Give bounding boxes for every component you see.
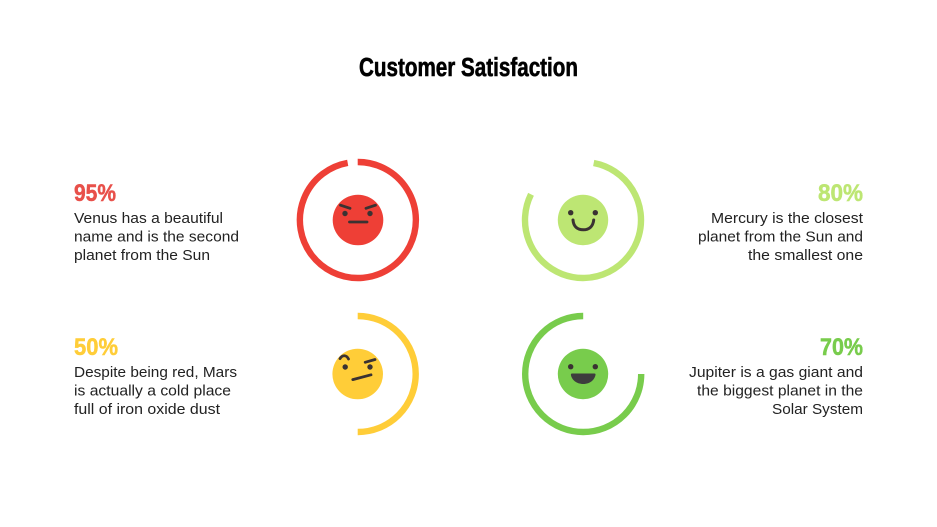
text block: Mercury description: Mercury is the closest — [711, 210, 864, 227]
icon: skeptical face — [332, 349, 383, 399]
percentage: 50%: 50% — [74, 334, 118, 361]
panel: 80% light green ring with smiling face — [525, 163, 641, 278]
progress ring: 50% — [358, 316, 416, 432]
icon: angry face — [333, 195, 383, 245]
text block: Jupiter description: Solar System — [772, 401, 863, 418]
percentage: 70%: 70% — [820, 334, 863, 361]
text block: Venus description: name and is the second — [74, 228, 239, 246]
percentage: 95%: 95% — [74, 180, 116, 207]
text block: Venus description: planet from the Sun — [74, 247, 210, 264]
percentage: 80%: 80% — [818, 180, 863, 207]
panel: 95% red ring with angry face — [300, 162, 416, 278]
panel: 70% green ring with laughing face — [525, 316, 641, 432]
text block: Mercury description: the smallest one — [748, 247, 863, 264]
panel: 50% yellow ring with skeptical face — [332, 316, 416, 432]
panel: 95% Venus text — [74, 180, 239, 264]
text block: Jupiter description: the biggest planet in the — [697, 382, 863, 400]
text block: Mars description: Despite being red, Mars — [74, 364, 237, 381]
text block: Mercury description: planet from the Sun and — [698, 228, 863, 246]
panel: 50% Mars text — [74, 334, 237, 418]
icon: smiling face — [558, 195, 608, 245]
progress ring: 95% — [300, 162, 416, 278]
text block: Mars description: is actually a cold place — [74, 382, 231, 400]
icon: laughing face — [558, 349, 608, 399]
progress ring: 80% — [525, 163, 641, 278]
text block: Jupiter description: Jupiter is a gas giant and — [689, 364, 863, 381]
title: Customer Satisfaction — [359, 54, 578, 82]
progress ring: 70% — [525, 316, 641, 432]
text block: Venus description: Venus has a beautiful — [74, 210, 223, 227]
panel: 80% Mercury text — [698, 180, 864, 264]
panel: 70% Jupiter text — [689, 334, 863, 418]
text block: Mars description: full of iron oxide dust — [74, 401, 221, 418]
